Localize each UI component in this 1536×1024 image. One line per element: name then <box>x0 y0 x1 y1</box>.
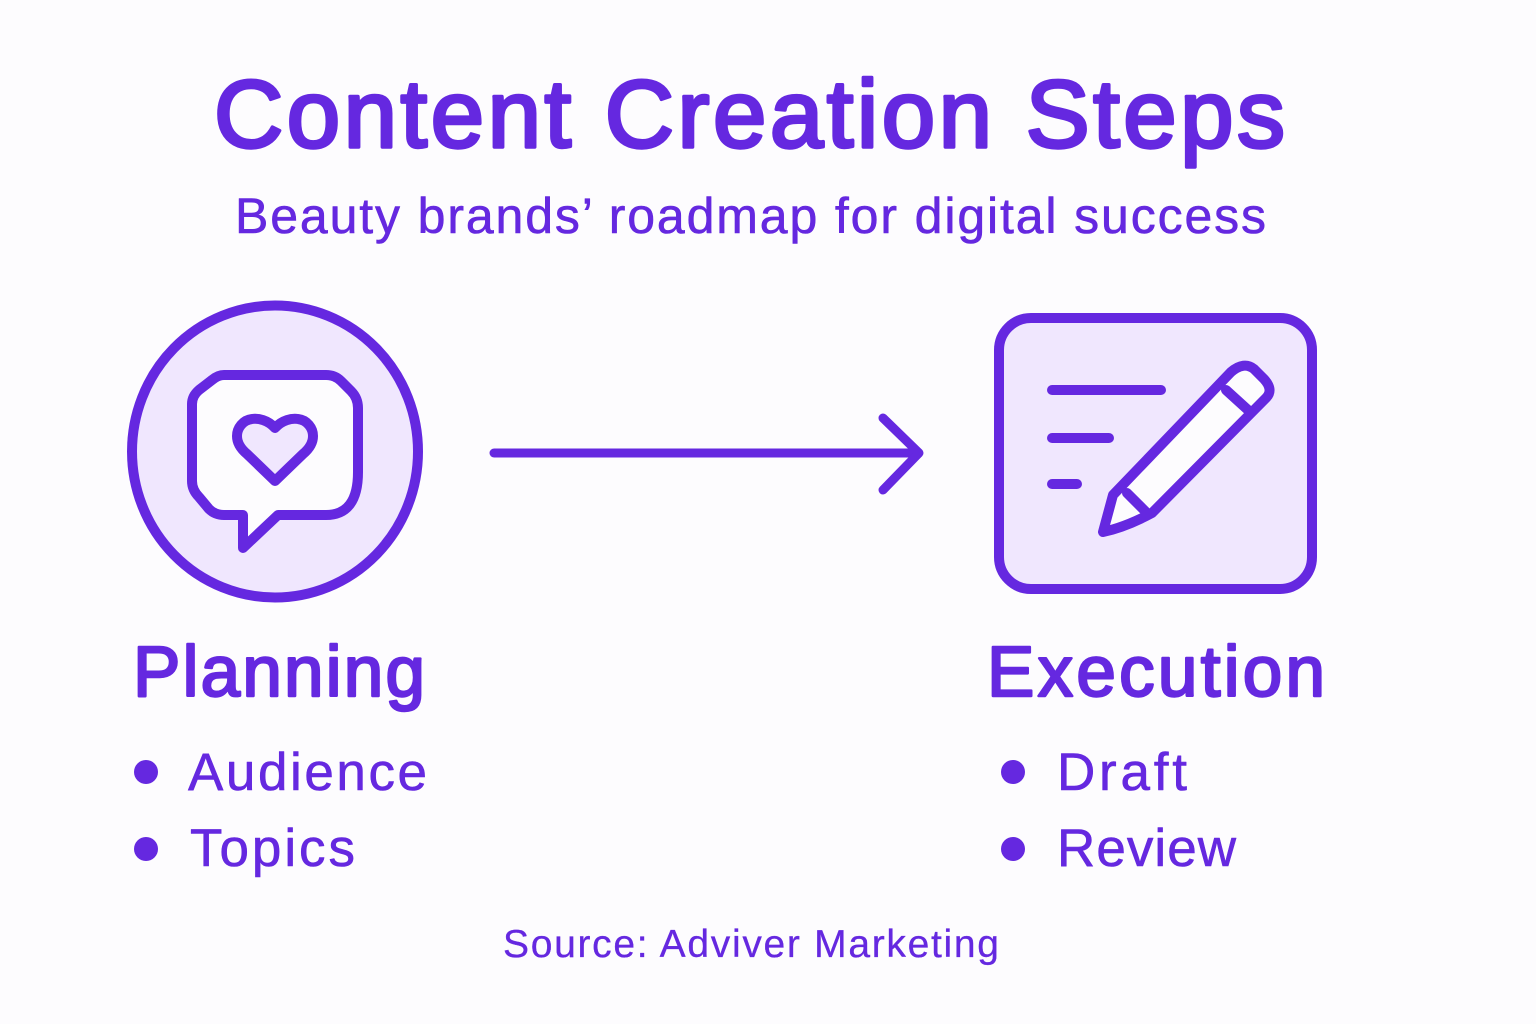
list: execution items: Draft <box>1057 743 1187 802</box>
panel: execution <box>987 318 1325 878</box>
panel: planning <box>132 306 427 878</box>
list: planning items <box>134 743 427 878</box>
subtitle: Beauty brands’ roadmap for digital success <box>235 188 1266 244</box>
source note: Source: Adviver Marketing <box>503 923 999 966</box>
list: execution items: Review <box>1057 819 1237 878</box>
arrow: planning to execution <box>494 418 919 490</box>
title: Content Creation Steps <box>214 61 1285 168</box>
list: planning items: Audience <box>188 743 427 802</box>
list: planning items: Topics <box>190 819 355 878</box>
icon: speech bubble with heart in circle <box>132 306 418 598</box>
heading: planning: Planning <box>133 633 425 712</box>
heading: execution: Execution <box>987 633 1325 712</box>
list: execution items <box>1001 743 1237 878</box>
icon: document with pencil <box>999 318 1312 589</box>
